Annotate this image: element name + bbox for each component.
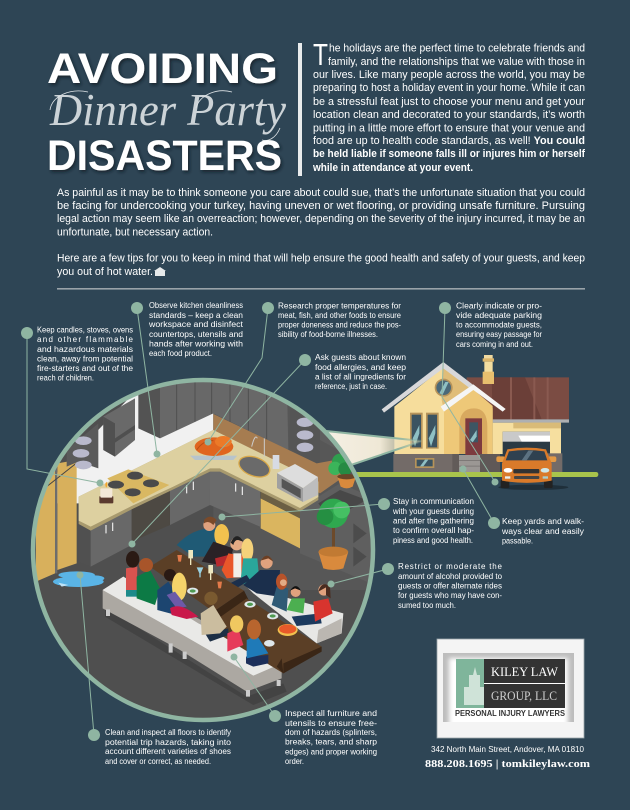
tip: furniture: Inspect all furniture and [285,709,377,718]
body paragraph: legal action may seem like an overreaction; however, depending on the severity of the injury incurred, it may be an [57,213,585,225]
tip: food allergies: food allergies, and keep [315,363,407,372]
tip: furniture: order. [285,757,304,766]
body paragraph [57,187,585,278]
chimney [483,355,494,384]
foundation and steps [393,454,500,472]
divider rule [57,288,585,290]
tip: proper temperatures: proper doneness and reduce the pos- [278,321,401,330]
tip: furniture: utensils to ensure free- [285,719,377,728]
intro paragraph: while in attendance at your event. [312,162,473,174]
intro paragraph: T [313,37,328,72]
marker dots [21,302,500,741]
tip: floors: potential trip hazards, taking into [105,738,232,747]
sink and faucet [236,437,279,481]
intro paragraph: food are up to health code standards, as well! You could [313,135,585,147]
title [47,45,287,180]
tip: parking: Clearly indicate or pro- [456,302,542,311]
tip: communication: with your guests during [392,507,474,516]
back wall [57,395,214,504]
tip: food allergies: Ask guests about known [315,353,406,362]
base cabinets [79,470,300,567]
tip: communication [392,497,474,545]
icon: small house end mark [154,267,166,276]
intro paragraph: putting in a little more effort to ensure that your venue and [313,122,585,134]
roof trim [382,362,506,413]
tip: yards and walkways: passable. [502,536,533,545]
tip: proper temperatures: Research proper temperatures for [278,302,401,311]
tip: kitchen cleanliness: each food product. [149,349,212,358]
right side shelving [318,490,366,566]
turkey on platter [190,436,237,460]
tip: candles and hazards: clean, away from potential [37,355,133,364]
house illustration [355,355,598,490]
dining table [150,550,322,673]
tip: furniture: edges) and proper working [285,747,377,756]
tip: kitchen cleanliness: standards – keep a clean [149,311,243,320]
lawn [355,472,598,477]
countertop [79,430,318,531]
intro paragraph: preparing to host a holiday event in your home. While it can [313,82,585,94]
contact details [425,744,590,770]
logo tower [456,659,484,708]
body paragraph: you out of hot water. [57,266,153,278]
backsplash [213,414,353,493]
door [36,460,78,582]
title divider bar [298,43,302,176]
tip: candles and hazards: reach of children. [37,374,94,383]
contact details: 342 North Main Street, Andover, MA 01810 [431,744,584,754]
tall cabinet [103,398,135,457]
tip: kitchen cleanliness: workspace and disinfect [148,320,244,329]
contact details: 888.208.1695 | tomkileylaw.com [425,758,590,770]
tip: kitchen cleanliness: Observe kitchen cleanliness [149,301,243,310]
microwave [277,464,318,502]
main house body [394,367,493,455]
roof [467,377,569,423]
tip: communication: to confirm overall hap- [393,526,474,535]
tip: food allergies: a list of all ingredients for [315,372,406,381]
logo panel: GROUP, LLC [491,689,557,703]
tip: yards and walkways [501,517,584,545]
tip: parking [456,302,542,349]
side wing [493,423,562,472]
tip: yards and walkways: ways clear and easily [501,527,584,536]
table settings [177,550,298,647]
tip: parking: cars coming in and out. [456,340,533,349]
sofa floor shadow [105,607,287,705]
body paragraph: As painful as it may be to think someone you care about could sue, that’s the unfortunate situation that you could [57,187,585,199]
tip: proper temperatures: sibility of food-borne illnesses. [278,330,378,339]
tip: proper temperatures: meat, fish, and other foods to ensure [278,311,402,320]
title: AVOIDING [47,45,278,93]
potted tree [317,499,350,570]
tip: parking: to accommodate guests, [456,321,542,330]
tip: candles and hazards: fire-starters and out of the [37,364,134,373]
tip: food allergies [315,353,407,391]
tip: floors [105,728,232,766]
kitchen and dining circular scene [32,370,387,721]
tip: floors: account different varieties of shoes [105,747,231,756]
tip: furniture: dom of hazards (splinters, [285,728,377,737]
puddle [53,571,104,587]
logo panel: PERSONAL INJURY LAWYERS [455,709,566,718]
tip: communication: and after the gathering [393,516,474,525]
tip: candles and hazards: and hazardous materials [37,345,133,354]
right plate shelf [296,418,314,452]
title: DISASTERS [47,132,282,180]
left plate shelf [67,423,98,469]
tip: alcohol: for guests who may have con- [398,591,502,600]
tip: proper temperatures [278,302,402,339]
car [496,448,568,490]
tip: alcohol: Restrict or moderate the [398,562,503,571]
tip: furniture [285,709,378,766]
dining group [53,482,350,705]
logo panel: KILEY LAW [491,665,558,679]
tip: food allergies: reference, just in case. [315,382,387,391]
tip: communication: piness and good health. [393,536,473,545]
plant on shelf [328,454,356,488]
intro paragraph: he holidays are the perfect time to celebrate friends and [329,42,585,54]
body paragraph: be facing for undercooking your turkey, having uneven or wet flooring, or providing unsafe furniture. Pursuing [57,200,585,212]
front row guests [126,551,268,667]
tip: candles and hazards: Keep candles, stoves, ovens [37,326,133,335]
body paragraph: unfortunate, but necessary action. [57,226,213,238]
tip: kitchen cleanliness [148,301,244,358]
intro paragraph: our lives. Like many people across the world, you may be [313,69,585,81]
intro paragraph [312,37,585,174]
tip: alcohol: sumed too much. [398,601,456,610]
tip: kitchen cleanliness: countertops, utensils and [149,330,243,339]
windows [410,379,453,449]
intro paragraph: location clean and decorated to your standards, it’s worth [313,109,585,121]
intro paragraph: be held liable if someone falls ill or injures him or herself [313,148,585,160]
tip: furniture: breaks, tears, and sharp [285,738,378,747]
stove top [107,469,169,503]
back row guests [177,517,333,626]
tip: floors: and cover or correct, as needed. [105,757,211,766]
intro paragraph: be a stressful feat just to choose your menu and get your [313,96,585,108]
tip: yards and walkways: Keep yards and walk- [502,517,584,526]
scene ring [33,380,373,720]
tip: communication: Stay in communication [393,497,474,506]
callout wedge from house to scene [326,431,422,465]
tip: alcohol: amount of alcohol provided to [398,572,503,581]
logo panel [437,639,584,738]
tip: kitchen cleanliness: hands after working with [149,340,243,349]
leader lines [27,308,495,735]
title: Dinner Party [49,84,287,135]
tip: alcohol: guests or offer alternate rides [398,581,502,590]
tip: candles and hazards [37,326,134,383]
candle [99,482,113,503]
tip: candles and hazards: and other flammable [37,335,134,344]
tip: parking: vide adequate parking [456,311,542,320]
dining sofa [103,577,343,697]
tip: floors: Clean and inspect all floors to identify [105,728,231,737]
tip: parking: ensuring easy passage for [456,330,542,339]
upper cabinets [138,382,288,450]
intro paragraph: family, and the relationships that we value with those in [328,56,585,68]
body paragraph: Here are a few tips for you to keep in mind that will help ensure the good health and safety of your guests, and keep [57,252,585,264]
tip: alcohol [398,562,503,610]
